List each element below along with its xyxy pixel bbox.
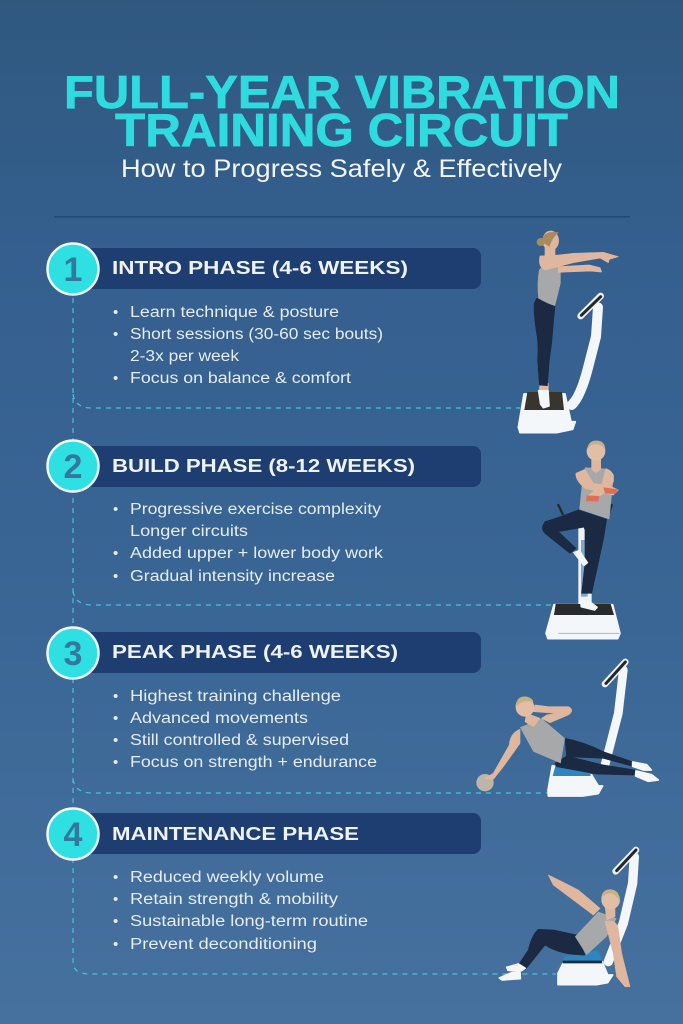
bullet list: •: [113, 370, 118, 387]
subtitle: How to Progress Safely & Effectively: [121, 155, 563, 183]
illustration: woman balancing on one leg on plate: [542, 441, 620, 639]
illustration: woman seated twist on plate: [499, 850, 636, 987]
panel: intro phase: [48, 244, 481, 387]
bullet list: Retain strength & mobility: [130, 891, 338, 908]
bullet list: Progressive exercise complexity: [130, 501, 381, 518]
number badge 3: [48, 628, 98, 678]
heading: MAINTENANCE PHASE: [112, 823, 359, 844]
bullet list: Learn technique & posture: [130, 304, 339, 321]
bullet list: Reduced weekly volume: [130, 869, 324, 886]
bullet list: Longer circuits: [130, 523, 248, 540]
bullet list: •: [113, 891, 118, 908]
bullet list: Gradual intensity increase: [130, 568, 335, 585]
illustration: woman standing on vibration plate, arms forward: [518, 231, 618, 433]
illustration: woman in side plank with ball on plate: [476, 662, 658, 796]
number badge 2: [48, 440, 98, 492]
bullet list: •: [113, 501, 118, 518]
bullet list: Prevent deconditioning: [130, 936, 317, 953]
heading bar: [85, 813, 481, 854]
bullet list: •: [113, 936, 118, 953]
heading: INTRO PHASE (4-6 WEEKS): [112, 257, 408, 278]
bullet list: Added upper + lower body work: [130, 545, 383, 562]
bullet list: •: [113, 326, 118, 343]
number badge 2: 2: [64, 448, 82, 486]
bullet list: •: [113, 754, 118, 771]
number badge 4: 4: [64, 816, 83, 854]
bullet list: 2-3x per week: [130, 348, 239, 365]
timeline dashed connector: [73, 298, 556, 974]
bullet list: •: [113, 732, 118, 749]
bullet list: [113, 304, 383, 387]
number badge 4: [48, 808, 98, 860]
number badge 1: 1: [64, 251, 82, 289]
bullet list: •: [113, 304, 118, 321]
panel: build phase: [48, 440, 481, 585]
heading bar: [85, 446, 481, 487]
bullet list: •: [113, 913, 118, 930]
panel: maintenance phase: [48, 808, 481, 953]
bullet list: [113, 869, 368, 953]
bullet list: •: [113, 568, 118, 585]
heading bar: [85, 248, 481, 289]
title: [64, 66, 620, 156]
heading bar: [85, 632, 481, 673]
bullet list: Still controlled & supervised: [130, 732, 349, 749]
panel: peak phase: [48, 628, 481, 771]
number badge 3: 3: [64, 635, 82, 673]
bullet list: Focus on strength + endurance: [130, 754, 377, 771]
bullet list: •: [113, 688, 118, 705]
bullet list: [113, 688, 377, 771]
title: FULL-YEAR VIBRATION: [64, 66, 620, 118]
bullet list: •: [113, 545, 118, 562]
title: TRAINING CIRCUIT: [115, 104, 568, 156]
bullet list: •: [113, 869, 118, 886]
bullet list: Advanced movements: [130, 710, 308, 727]
number badge 1: [48, 244, 98, 294]
bullet list: Highest training challenge: [130, 688, 341, 705]
bullet list: •: [113, 710, 118, 727]
bullet list: Sustainable long-term routine: [130, 913, 368, 930]
heading: PEAK PHASE (4-6 WEEKS): [112, 641, 398, 662]
bullet list: [113, 501, 383, 585]
bullet list: Focus on balance & comfort: [130, 370, 352, 387]
heading: BUILD PHASE (8-12 WEEKS): [112, 455, 415, 476]
bullet list: Short sessions (30-60 sec bouts): [130, 326, 383, 343]
